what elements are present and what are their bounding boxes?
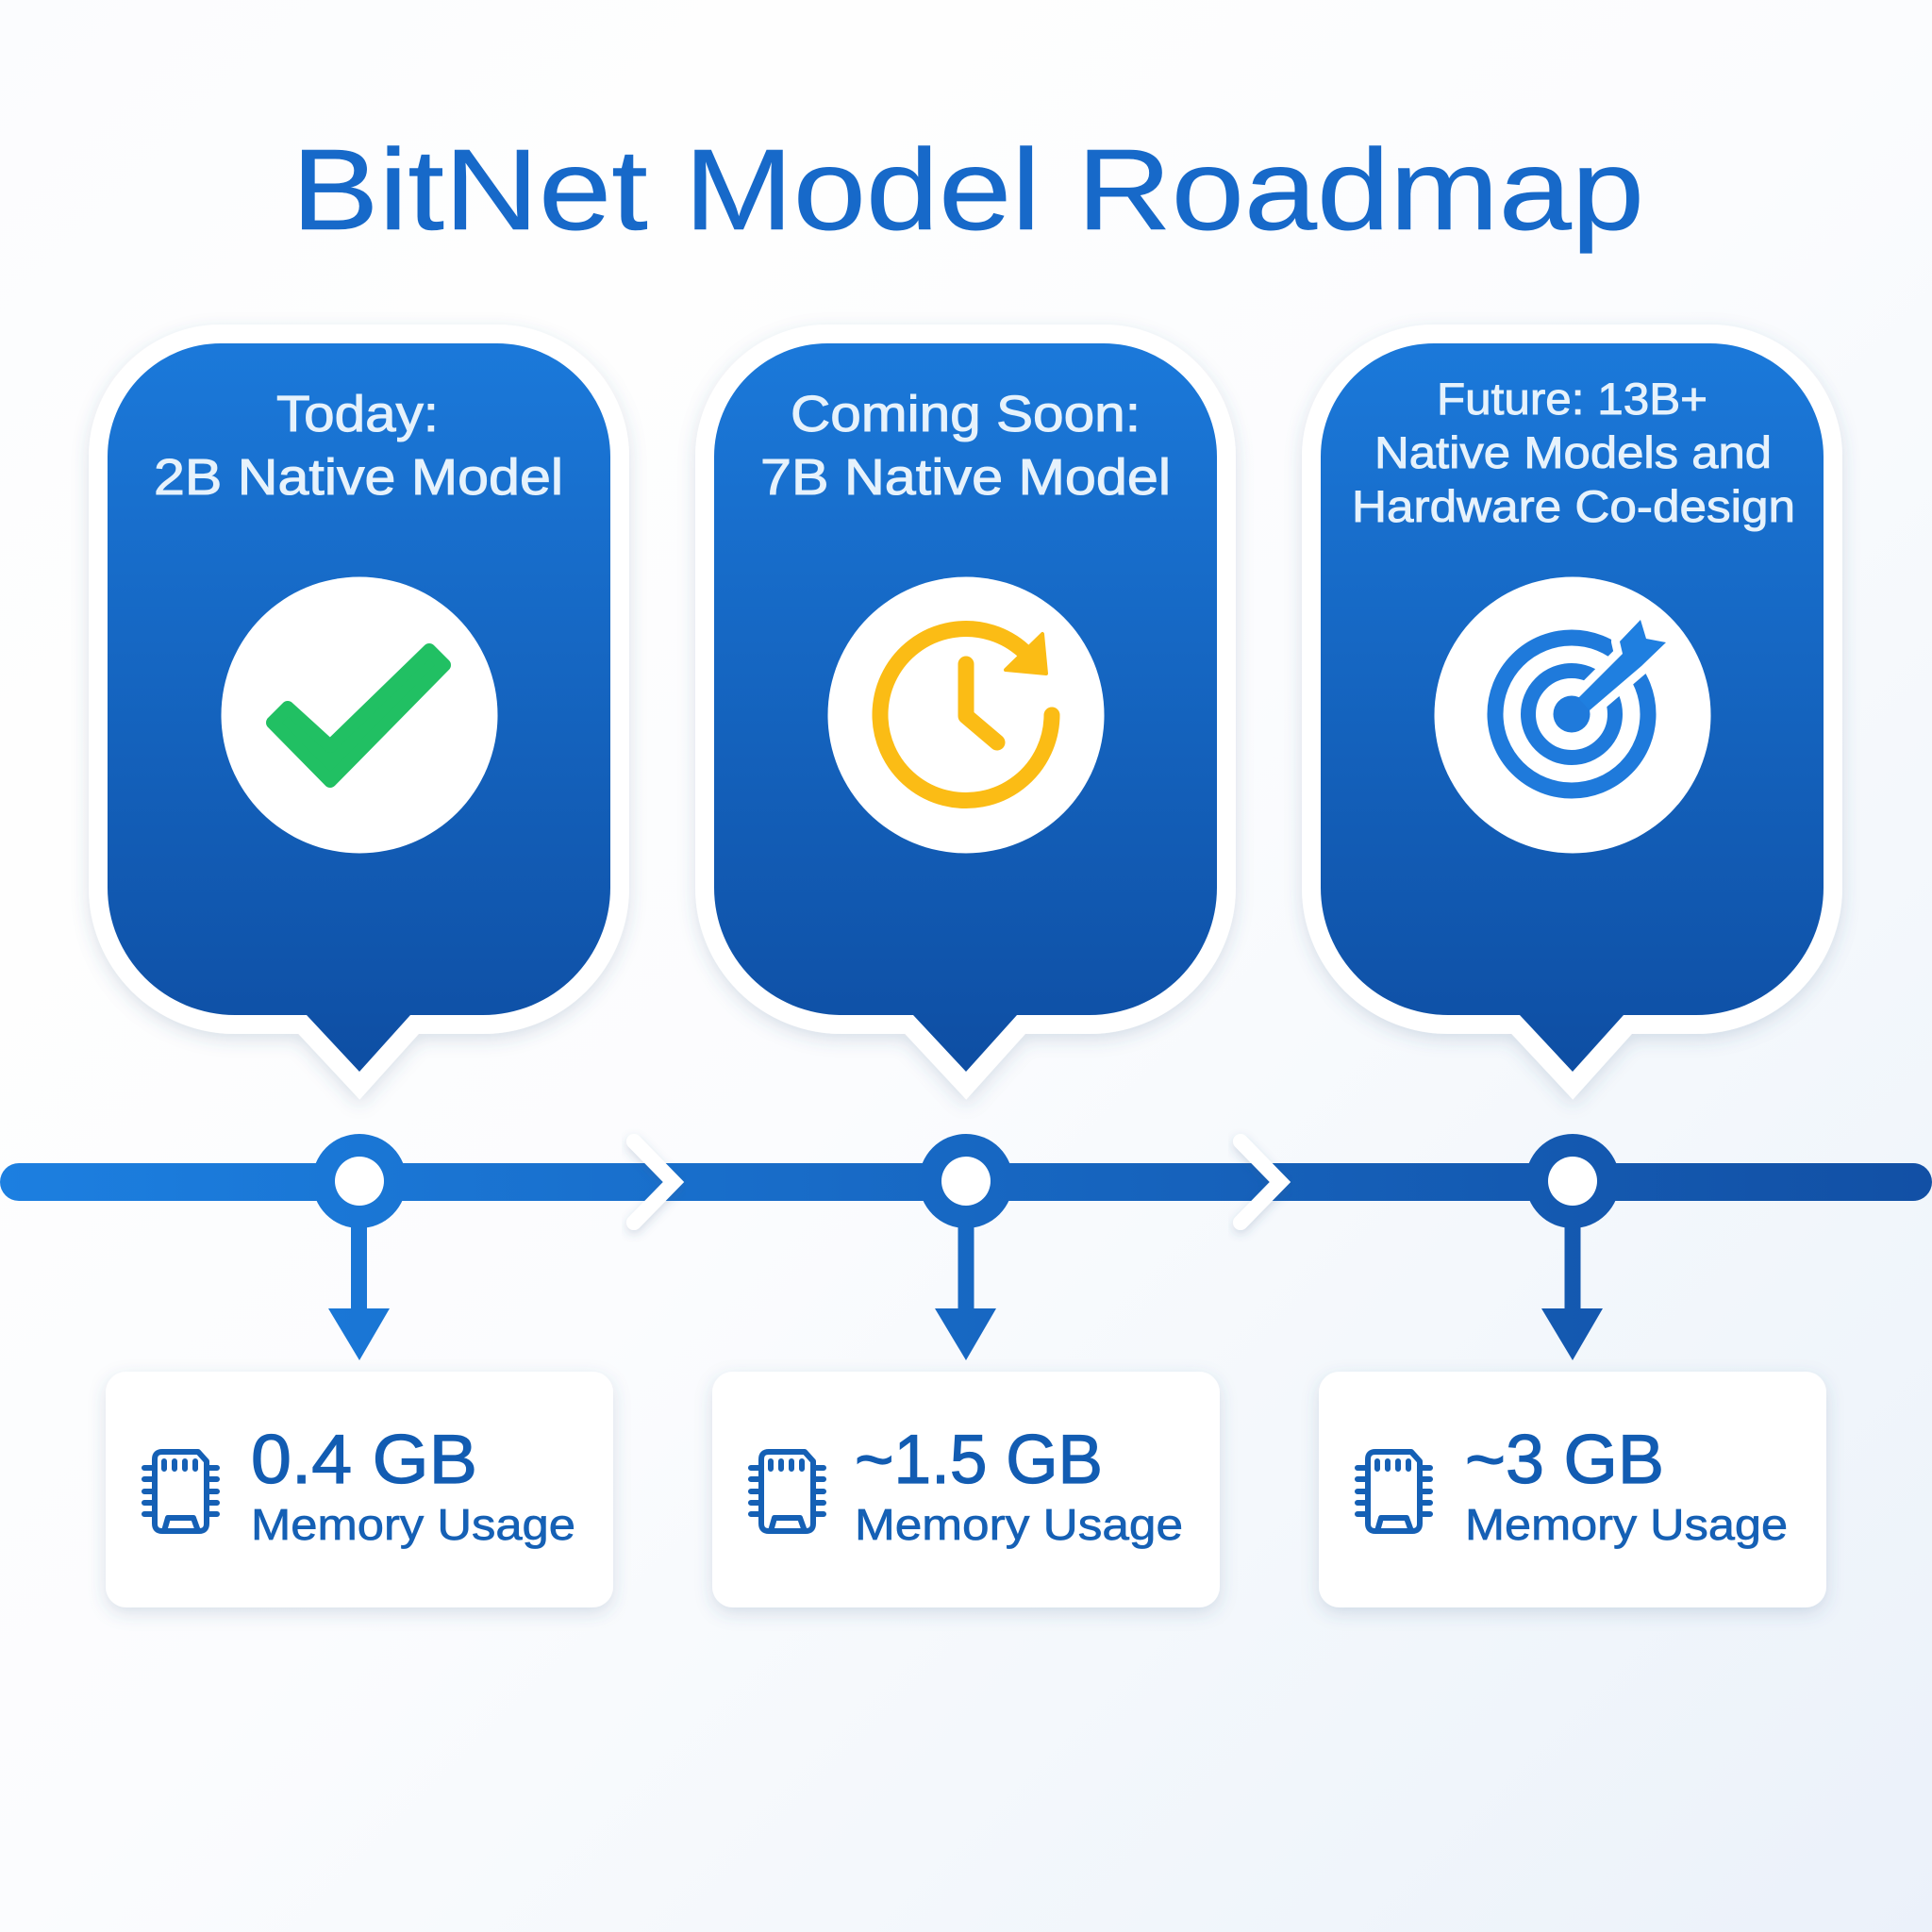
memory value: ~1.5 GB [855,1422,1103,1498]
panel: memory card 1.5 GB [712,1372,1220,1607]
timeline node 2 with arrow [919,1134,1013,1360]
heading: future: Native Models and [1374,427,1772,477]
heading: coming soon: Coming Soon: [791,386,1141,442]
panel: coming soon bubble [714,343,1217,1072]
heading: today [154,386,563,506]
timeline bar [0,1163,1932,1201]
icon: memory chip [144,1452,217,1531]
bubble shape: today [108,343,610,1072]
icon: memory chip [1357,1452,1430,1531]
heading: coming soon [760,386,1171,506]
bubble shape: future [1321,343,1824,1072]
heading: today: Today: [276,386,439,442]
icon: target with arrow [1434,577,1711,853]
bubble shape: coming soon [714,343,1217,1072]
icon: green check [221,577,498,853]
icon: yellow clock [828,577,1104,853]
heading: future: Hardware Co-design [1352,481,1795,531]
memory value: 0.4 GB [251,1422,477,1498]
memory value: ~3 GB [1465,1422,1664,1498]
heading: future [1352,374,1795,531]
panel: memory card 0.4 GB [106,1372,613,1607]
timeline node 3 with arrow [1525,1134,1620,1360]
memory label: Memory Usage [251,1500,575,1549]
icon: memory chip [751,1452,824,1531]
panel: future bubble [1321,343,1824,1072]
memory label: Memory Usage [1465,1500,1788,1549]
panel: today bubble [108,343,610,1072]
arrow: chevron 2 [1241,1141,1280,1223]
heading: coming soon: 7B Native Model [760,449,1171,506]
timeline node 1 with arrow [312,1134,407,1360]
heading: today: 2B Native Model [154,449,563,506]
heading: future: Future: 13B+ [1437,374,1707,424]
memory label: Memory Usage [855,1500,1183,1549]
title: BitNet Model Roadmap [291,125,1644,254]
panel: memory card 3 GB [1319,1372,1826,1607]
arrow: chevron 1 [634,1141,674,1223]
